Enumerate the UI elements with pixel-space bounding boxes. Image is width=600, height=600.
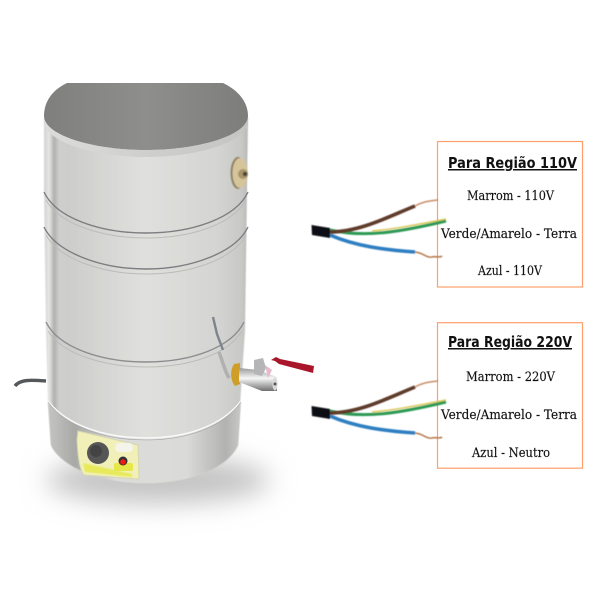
text: verde/amarelo: Verde/Amarelo - Terra — [440, 408, 577, 423]
text: verde/amarelo: Verde/Amarelo - Terra — [440, 227, 577, 242]
wires 220V — [312, 381, 446, 438]
drain valve — [213, 317, 314, 391]
knob — [87, 442, 109, 464]
panel: 110V — [438, 142, 582, 287]
band 1 — [44, 192, 248, 233]
tank body — [44, 118, 248, 483]
band 3 — [46, 322, 244, 362]
text: azul: Azul - Neutro — [471, 446, 550, 461]
control panel — [77, 431, 139, 479]
side fitting — [230, 157, 248, 189]
tank rim — [44, 116, 248, 157]
band 4 — [48, 401, 241, 438]
band 2 — [44, 227, 248, 269]
valve stem — [254, 358, 266, 376]
red handle — [271, 357, 314, 373]
tank open top — [44, 83, 248, 150]
heading 110V: Para Região 110V — [448, 154, 577, 172]
brass nut — [231, 363, 240, 386]
box 220V — [438, 323, 582, 468]
valve body — [239, 368, 277, 391]
floor shadow — [46, 456, 270, 504]
level rod — [213, 317, 223, 350]
text: marrom: Marrom - 220V — [466, 370, 556, 385]
box 110V — [438, 142, 582, 287]
text: azul: Azul - 110V — [477, 264, 543, 279]
heading 220V: Para Região 220V — [448, 333, 572, 351]
wires 110V — [312, 200, 446, 257]
tank — [44, 83, 248, 483]
power cable — [15, 380, 46, 386]
tank base band — [48, 402, 241, 483]
indicator light — [114, 463, 133, 471]
text: marrom: Marrom - 110V — [467, 189, 555, 204]
panel: 220V — [438, 323, 582, 468]
